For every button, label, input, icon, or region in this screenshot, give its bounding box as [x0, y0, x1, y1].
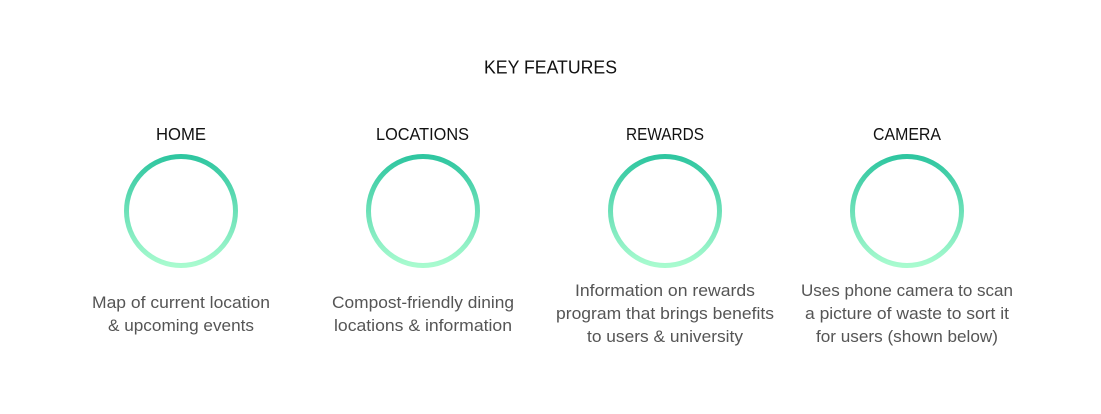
panel: camera: [801, 124, 1013, 346]
text: locations description: Compost-friendly dining: [332, 293, 514, 312]
heading: rewards: REWARDS: [626, 124, 704, 144]
text: camera description: for users (shown below): [816, 327, 998, 346]
heading: camera: CAMERA: [873, 124, 941, 144]
text: rewards description: [556, 281, 774, 346]
text: camera description: a picture of waste to sort it: [805, 304, 1009, 323]
icon: home ring: [126, 156, 236, 266]
heading: locations: LOCATIONS: [376, 124, 469, 144]
text: home description: & upcoming events: [108, 316, 254, 335]
panel: rewards: [556, 124, 774, 346]
panel: home: [92, 124, 270, 335]
text: camera description: Uses phone camera to scan: [801, 281, 1013, 300]
icon: locations ring: [368, 156, 478, 266]
text: locations description: [332, 293, 514, 335]
panel: locations: [332, 124, 514, 335]
text: locations description: locations & information: [334, 316, 512, 335]
text: camera description: [801, 281, 1013, 346]
text: home description: [92, 293, 270, 335]
title: KEY FEATURES: [484, 56, 617, 78]
text: home description: Map of current location: [92, 293, 270, 312]
text: rewards description: to users & university: [587, 327, 744, 346]
heading: home: HOME: [156, 124, 206, 144]
icon: camera ring: [852, 156, 962, 266]
text: rewards description: Information on rewards: [575, 281, 755, 300]
text: rewards description: program that brings benefits: [556, 304, 774, 323]
icon: rewards ring: [610, 156, 720, 266]
